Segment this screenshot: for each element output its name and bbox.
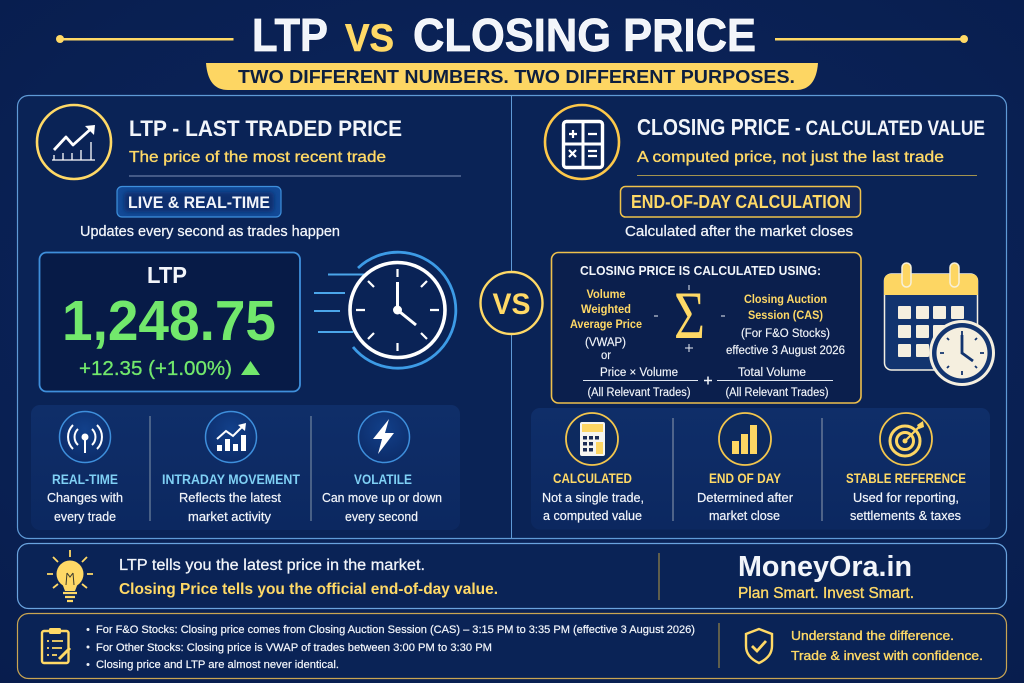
closing message: Understand the difference.	[791, 629, 954, 643]
bullet notes: For Other Stocks: Closing price is VWAP of trades between 3:00 PM to 3:30 PM	[96, 642, 492, 654]
bullet notes: Closing price and LTP are almost never identical.	[96, 659, 339, 671]
panel: closing price features	[531, 408, 990, 530]
heading: LTP - LAST TRADED PRICE	[129, 116, 402, 141]
bullet notes	[86, 624, 695, 671]
badge: end-of-day calculation	[620, 186, 860, 217]
VS badge: VS	[492, 288, 530, 321]
formula: closing auction column: Session (CAS)	[748, 310, 823, 322]
formula: closing auction column: effective 3 August 2026	[726, 345, 845, 357]
formula: VWAP column: Weighted	[581, 304, 631, 316]
icon: speeding clock	[314, 252, 456, 368]
header: title and tagline	[56, 9, 968, 90]
feature: real-time: Changes with	[47, 491, 123, 505]
formula: fractions	[583, 367, 833, 399]
text: update frequency: Updates every second as trades happen	[80, 224, 340, 240]
feature: stable reference: settlements & taxes	[850, 509, 961, 523]
feature: calculated: Not a single trade,	[542, 491, 644, 505]
badge: end-of-day calculation: END-OF-DAY CALCULATION	[631, 192, 851, 212]
feature: real-time: REAL-TIME	[52, 472, 118, 487]
icon: rising line chart	[37, 105, 111, 179]
tagline ribbon	[206, 63, 818, 90]
panel: LTP features	[31, 405, 460, 530]
feature: end of day: Determined after	[697, 491, 793, 505]
feature: volatile	[322, 412, 442, 524]
brand: MoneyOra.in	[738, 551, 912, 583]
feature: stable reference	[846, 413, 966, 523]
heading: CLOSING PRICE	[637, 114, 790, 140]
title: VS	[345, 17, 394, 60]
feature: real-time: every trade	[54, 510, 116, 524]
feature: volatile: Can move up or down	[322, 491, 442, 505]
summary text: LTP tells you the latest price in the market.	[119, 557, 425, 574]
feature: stable reference: Used for reporting,	[853, 491, 959, 505]
icon: calculator keys	[545, 105, 619, 179]
price card: +12.35 (+1.00%)	[79, 358, 232, 380]
feature: end of day: END OF DAY	[709, 471, 781, 486]
notes banner	[18, 614, 1006, 678]
title: CLOSING PRICE	[413, 9, 756, 61]
VS badge	[480, 272, 542, 334]
main comparison panel	[18, 96, 1006, 538]
feature: intraday movement: Reflects the latest	[179, 491, 282, 505]
title	[56, 9, 968, 61]
feature: stable reference: STABLE REFERENCE	[846, 471, 966, 486]
feature: intraday movement: INTRADAY MOVEMENT	[162, 472, 301, 487]
panel: closing price	[531, 105, 995, 530]
heading	[637, 114, 985, 140]
formula: VWAP column: Average Price	[570, 319, 642, 331]
formula: sigma: Σ	[674, 277, 705, 353]
price card: 1,248.75	[62, 289, 276, 353]
summary text	[119, 557, 498, 598]
text: calculation timing: Calculated after the market closes	[625, 224, 853, 240]
feature: intraday movement: market activity	[188, 510, 272, 524]
formula: fractions: (All Relevant Trades)	[588, 387, 691, 399]
icon: light bulb	[47, 550, 93, 601]
feature: calculated	[542, 413, 644, 523]
formula card: CLOSING PRICE IS CALCULATED USING:	[580, 263, 821, 278]
formula: closing auction column: (For F&O Stocks)	[741, 328, 830, 340]
feature: intraday movement	[162, 412, 301, 524]
feature: end of day: market close	[709, 509, 780, 523]
icon: clipboard	[42, 628, 70, 663]
formula: VWAP column: Volume	[586, 289, 626, 301]
feature: calculated: a computed value	[543, 509, 642, 523]
formula card	[552, 252, 861, 403]
feature: end of day	[697, 413, 793, 523]
brand: Plan Smart. Invest Smart.	[738, 585, 914, 602]
summary text: Closing Price tells you the official end-of-day value.	[119, 581, 498, 598]
feature: calculated: CALCULATED	[553, 471, 632, 486]
heading: - CALCULATED VALUE	[795, 117, 985, 140]
panel: LTP	[31, 105, 461, 530]
icon: shield check	[746, 629, 772, 663]
icon: calendar with clock	[884, 263, 995, 386]
bullet notes: For F&O Stocks: Closing price comes from Closing Auction Session (CAS) – 3:15 PM to 3:35 PM (effective 3 August 2026)	[96, 624, 695, 636]
formula: closing auction column: Closing Auction	[744, 294, 827, 306]
summary banner	[18, 544, 1006, 608]
closing message	[791, 629, 983, 663]
formula: fractions: (All Relevant Trades)	[726, 387, 829, 399]
tagline ribbon: TWO DIFFERENT NUMBERS. TWO DIFFERENT PURPOSES.	[238, 67, 795, 87]
formula: closing auction column	[726, 294, 845, 357]
feature: volatile: every second	[345, 510, 418, 524]
feature: volatile: VOLATILE	[354, 472, 412, 487]
title: LTP	[252, 9, 328, 61]
brand	[738, 551, 914, 602]
formula: VWAP column	[570, 289, 642, 362]
feature: real-time	[47, 412, 123, 524]
subheading: The price of the most recent trade	[129, 149, 386, 166]
formula: VWAP column: (VWAP)	[585, 337, 626, 349]
formula: fractions: Price × Volume	[600, 367, 678, 379]
badge: live and real-time: LIVE & REAL-TIME	[128, 193, 270, 212]
formula: fractions: Total Volume	[738, 367, 806, 379]
subheading: A computed price, not just the last trade	[637, 149, 944, 166]
badge: live and real-time	[117, 186, 281, 217]
formula: VWAP column: or	[601, 350, 611, 362]
price card: LTP	[147, 262, 187, 288]
closing message: Trade & invest with confidence.	[791, 649, 983, 663]
formula: sigma	[654, 277, 725, 353]
price card	[40, 252, 300, 392]
